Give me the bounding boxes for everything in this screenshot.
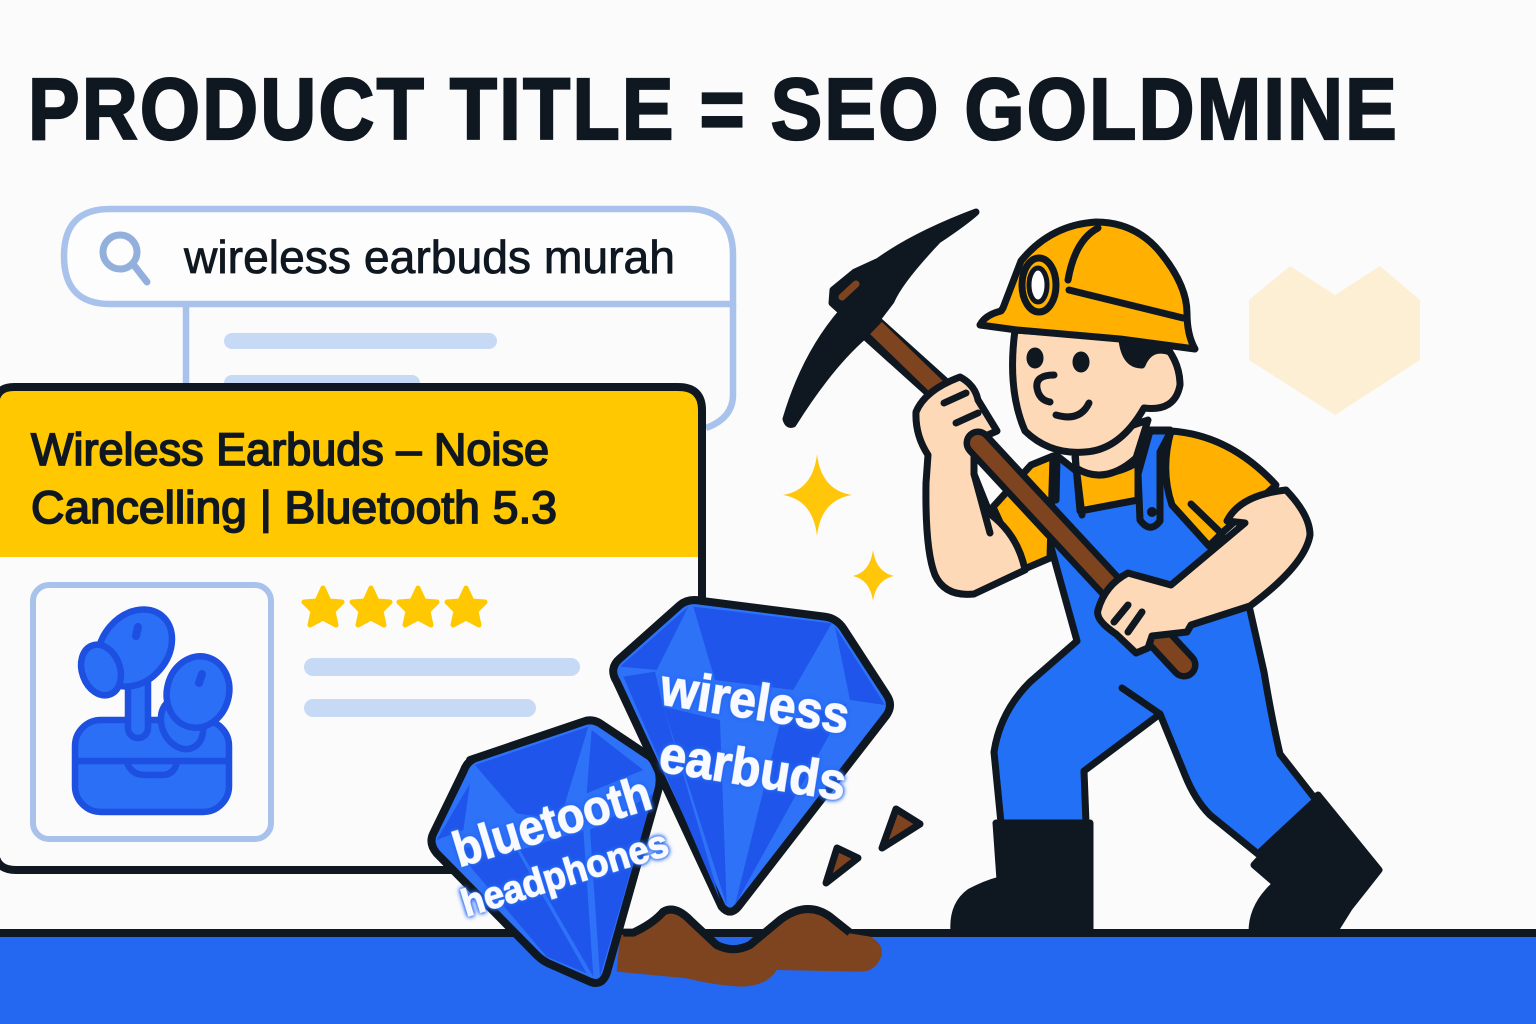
bib strap left	[1056, 457, 1082, 515]
product title line 1: Wireless Earbuds – Noise	[31, 424, 549, 475]
crease line	[1122, 688, 1160, 714]
miner character	[786, 212, 1379, 932]
rock chips	[826, 809, 920, 883]
product title line 2: Cancelling | Bluetooth 5.3	[31, 482, 557, 533]
earbud dots	[136, 627, 202, 683]
background hexagon shape	[1249, 266, 1420, 415]
helmet ridge	[1068, 228, 1098, 280]
overalls	[994, 430, 1316, 854]
star rating	[304, 588, 485, 625]
icon: earbuds in case	[74, 595, 237, 812]
eye right	[1076, 355, 1086, 369]
eye left	[1030, 351, 1040, 365]
boot right	[1252, 795, 1379, 932]
search input	[64, 209, 733, 304]
finger lines upper	[944, 393, 978, 423]
gem: wireless earbuds	[613, 600, 890, 912]
description line 2	[304, 699, 536, 717]
earbud stem	[128, 672, 148, 738]
product image frame	[33, 585, 271, 839]
right earbud tip	[153, 692, 211, 756]
gem label: headphones: headphones	[457, 823, 673, 925]
shirt left sleeve	[993, 456, 1053, 570]
card body	[0, 387, 703, 870]
case seam and notch	[75, 761, 229, 775]
title: PRODUCT TITLE = SEO GOLDMINE	[28, 61, 1399, 158]
shirt right sleeve	[1166, 431, 1276, 546]
panel: product card	[0, 387, 703, 870]
right arm and lower hand	[1098, 490, 1310, 653]
dropdown outline	[186, 305, 733, 428]
sparkle large	[783, 454, 852, 536]
bib strap right	[1138, 431, 1171, 527]
earbud case	[75, 720, 229, 812]
card outline	[0, 387, 702, 870]
search results dropdown	[186, 305, 733, 428]
helmet	[980, 222, 1195, 349]
icon: magnifier	[103, 235, 147, 282]
ear and face	[1013, 330, 1180, 452]
nose	[1037, 375, 1054, 402]
left arm and upper hand	[916, 377, 1025, 594]
shirt center	[1076, 462, 1138, 511]
pickaxe handle lower	[978, 443, 1184, 665]
description line 1	[304, 658, 580, 676]
dirt mound	[617, 909, 882, 987]
search box panel	[64, 209, 733, 428]
card yellow header	[0, 389, 699, 557]
right earbud body	[159, 649, 237, 735]
sparkle small	[853, 550, 894, 601]
result line 2	[224, 375, 420, 391]
finger lines lower	[1114, 605, 1142, 632]
helmet band	[1069, 290, 1183, 318]
gem label: bluetooth: bluetooth	[447, 766, 657, 878]
boot left	[954, 823, 1090, 932]
hair	[1122, 335, 1170, 365]
pickaxe head	[786, 212, 976, 424]
gem label: earbuds: earbuds	[655, 726, 850, 812]
strap button	[1147, 507, 1157, 517]
left earbud body	[83, 595, 187, 701]
left earbud tip	[74, 639, 128, 701]
gem label: wireless: wireless	[656, 658, 853, 746]
gem: bluetooth headphones	[431, 720, 673, 983]
result line 1	[224, 333, 497, 349]
lamp glass	[1029, 268, 1047, 302]
smile	[1056, 403, 1089, 417]
pickaxe handle upper	[842, 284, 940, 390]
forearm line	[974, 474, 990, 533]
ground strip	[0, 929, 1536, 1024]
sleeve fold	[1191, 504, 1222, 534]
neck	[1075, 420, 1148, 475]
helmet lamp	[1022, 258, 1056, 312]
search query text: wireless earbuds murah	[183, 231, 675, 283]
